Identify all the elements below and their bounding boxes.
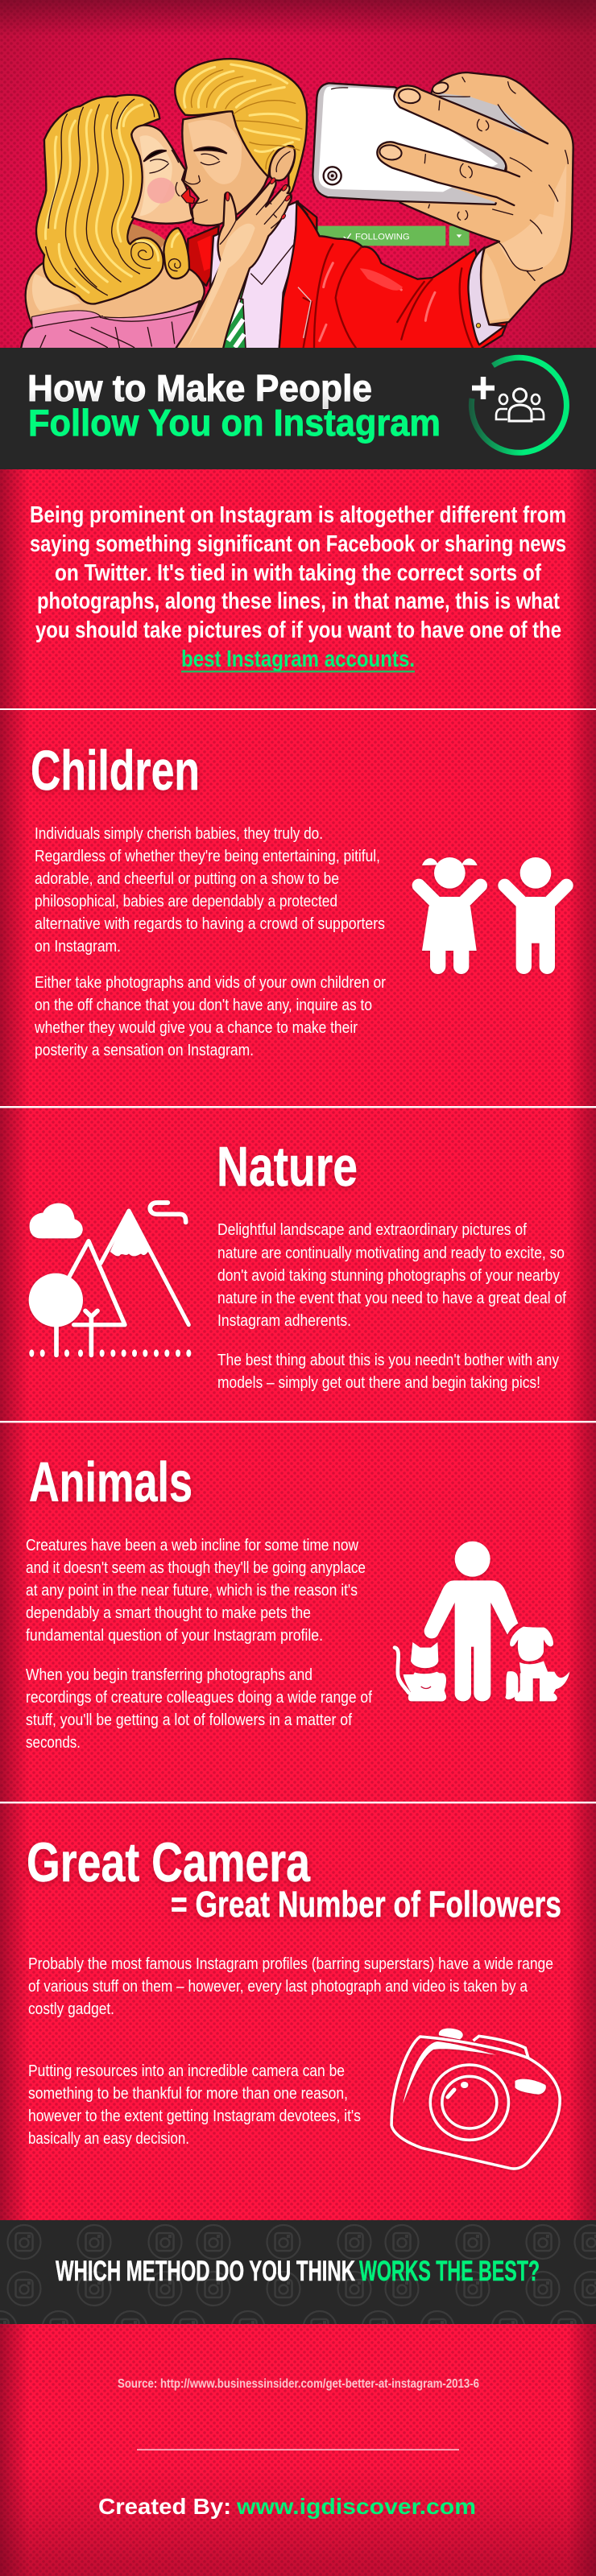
text: animals body: dependably a smart thought to make pets the [26, 1604, 311, 1622]
text: camera body [28, 1955, 553, 2148]
call to action band [0, 2220, 596, 2324]
heading: animals: Animals [29, 1451, 192, 1513]
text: animals body: When you begin transferring photographs and [26, 1666, 312, 1684]
call to action text: WHICH METHOD DO YOU THINK [56, 2256, 355, 2287]
icon: person with cat and dog [395, 1542, 569, 1702]
woman's hand on man's neck [175, 177, 292, 350]
text: children body: Regardless of whether they're being entertaining, pitiful, [35, 847, 380, 865]
text: nature body [217, 1220, 566, 1392]
title [27, 367, 441, 444]
woman's curl [131, 228, 189, 279]
panel: nature [29, 1135, 566, 1392]
text: animals body: stuff, you'll be getting a lot of followers in a matter of [26, 1711, 352, 1729]
woman's shoulders and blouse [21, 223, 205, 349]
hero illustration: couple taking a selfie [21, 59, 573, 350]
fingers [377, 77, 568, 280]
jacket sleeve [279, 203, 507, 349]
phone [312, 83, 529, 204]
man's head and hair [175, 59, 307, 225]
heading: nature: Nature [217, 1135, 358, 1198]
text: animals body: recordings of creature colleagues doing a wide range of [26, 1688, 372, 1707]
background pattern of instagram icons [0, 2224, 596, 2324]
following button [314, 226, 470, 246]
title: Follow You on Instagram [28, 402, 441, 444]
text: children body: whether they would give you a chance to make their [34, 1018, 358, 1037]
text: animals body: at any point in the near future, which is the reason it's [26, 1581, 358, 1600]
heading: children: Children [31, 739, 200, 802]
man's shirt and left lapel [188, 201, 317, 349]
credit line [98, 2494, 476, 2519]
text: nature body: models – simply get out there and begin taking pics! [217, 1373, 540, 1392]
text: nature body: Instagram adherents. [217, 1311, 351, 1330]
text: animals body [26, 1536, 372, 1752]
text: camera body: something to be thankful for more than one reason, [28, 2084, 348, 2103]
text: children body: Individuals simply cherish babies, they truly do. [35, 824, 323, 843]
text: children body: posterity a sensation on Instagram. [35, 1041, 254, 1059]
text: nature body: Delightful landscape and extraordinary pictures of [217, 1220, 527, 1239]
shirt cuff [468, 247, 505, 345]
credit line: www.igdiscover.com [236, 2494, 476, 2519]
heading: great camera: Great Camera [27, 1831, 310, 1893]
text: children body: alternative with regards to having a crowd of supporters [35, 914, 385, 933]
icon: camera [391, 2029, 560, 2169]
woman's hair [36, 95, 163, 304]
text: camera body: basically an easy decision. [28, 2129, 189, 2148]
following button: FOLLOWING [355, 232, 410, 242]
panel: children [31, 739, 566, 1059]
intro text block [30, 502, 566, 672]
text: children body: on the off chance that you don't have any, inquire as to [35, 996, 372, 1014]
icon: mountains and trees [29, 1203, 191, 1357]
intro text block: best Instagram accounts. [181, 646, 415, 672]
title band [0, 348, 596, 469]
woman's face [131, 126, 195, 224]
text: children body: Either take photographs and vids of your own children or [35, 973, 386, 992]
icon: children [419, 857, 566, 974]
text: camera body: costly gadget. [28, 2000, 114, 2018]
text: animals body: seconds. [26, 1733, 81, 1752]
text: children body [34, 824, 386, 1059]
text: camera body: Putting resources into an incredible camera can be [28, 2062, 345, 2080]
hand behind phone [400, 72, 573, 324]
text: children body: philosophical, babies are dependably a protected [35, 892, 337, 910]
text: animals body: and it doesn't seem as though they'll be going anyplace [26, 1558, 366, 1577]
text: camera body: however to the extent getting Instagram devotees, it's [28, 2107, 361, 2125]
credit line: Created By: [98, 2494, 231, 2519]
panel: great camera [27, 1831, 561, 2169]
text: animals body: fundamental question of your Instagram profile. [26, 1626, 323, 1645]
title: How to Make People [27, 367, 372, 409]
text: children body: adorable, and cheerful or putting on a show to be [35, 869, 339, 888]
text: animals body: Creatures have been a web incline for some time now [26, 1536, 358, 1554]
panel: animals [26, 1451, 569, 1752]
text: children body: on Instagram. [35, 937, 121, 956]
icon: follow ring [471, 357, 566, 452]
source line: Source: http://www.businessinsider.com/get-better-at-instagram-2013-6 [118, 2377, 479, 2391]
